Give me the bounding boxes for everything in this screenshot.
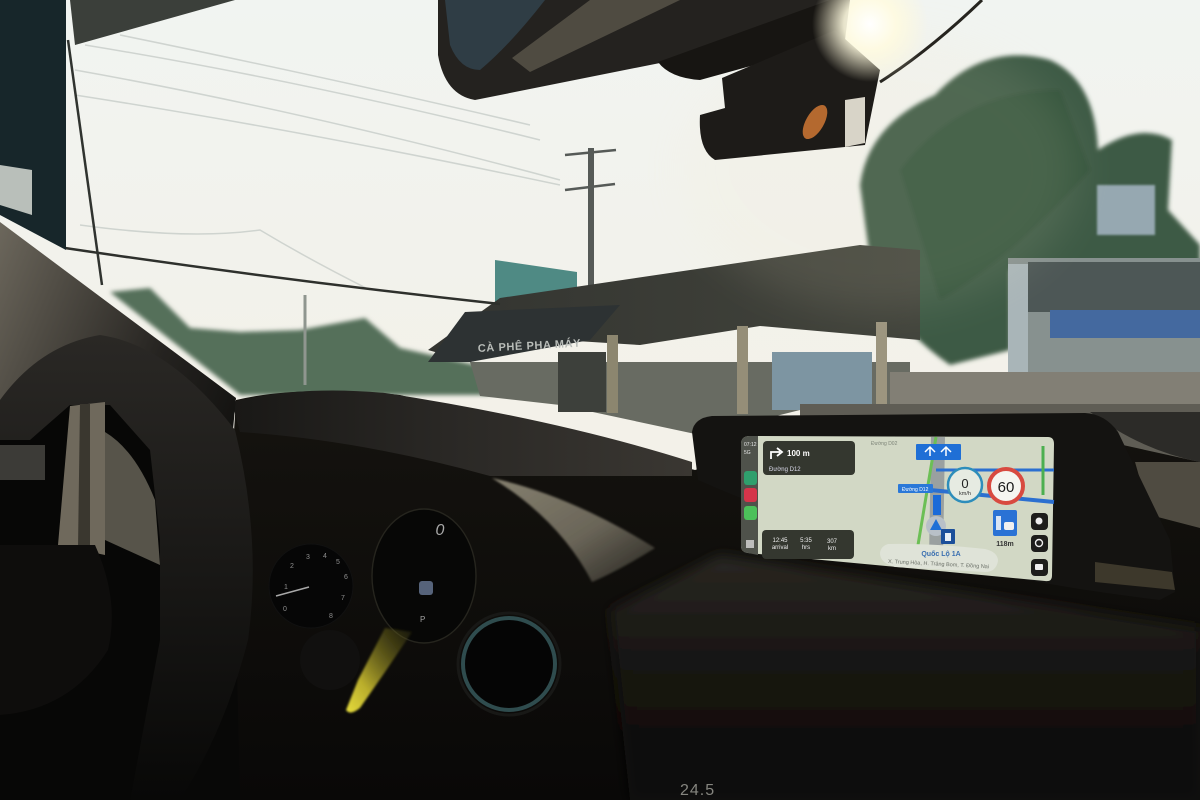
location label: X. Trung Hòa, H. Trảng Bom, T. Đồng Nai [888,559,989,570]
centre dial: 0 [436,522,445,539]
speed gauge [948,468,982,502]
tachometer: 6 [344,574,348,581]
speed gauge: km/h [959,491,971,497]
overhead power lines [75,35,560,290]
lit dashboard surface [492,478,655,582]
navigation screen: Đường D02 [871,441,898,447]
lower dashboard panel [610,555,1200,800]
tachometer: 8 [329,613,333,620]
tachometer [269,544,353,628]
centre dial [372,509,476,643]
tachometer: 5 [336,559,340,566]
round vent with teal ring [458,613,560,715]
right control buttons [1031,513,1048,576]
steering wheel [0,335,253,800]
location label: Quốc Lộ 1A [921,550,961,558]
tachometer: 3 [306,554,310,561]
trip info card [762,530,854,559]
dashboard top hood [232,390,692,476]
speed gauge: 0 [961,476,969,491]
dashboard body [210,391,1200,800]
speed limit sign: 60 [998,479,1014,496]
camera warning sign: 118m [996,541,1014,548]
road label [898,484,933,493]
instrument cluster [269,509,715,799]
sun glare over windshield [680,30,1080,310]
lane guidance sign [916,444,961,460]
roadside building: CÀ PHÊ PHA MÁY [477,337,581,355]
turn instruction card: 100 m [787,449,810,458]
left dock: 5G [744,450,751,456]
tachometer: 7 [341,595,345,602]
right-side building and fence [800,185,1200,464]
sagging cable [65,248,500,304]
dash camera [700,0,982,160]
left dock: 07:12 [744,442,757,448]
tachometer: 1 [284,584,288,591]
turn instruction card: Đường D12 [769,467,801,473]
distant treeline [110,288,490,395]
left interior pillar [0,222,240,800]
trip info card: arrival [772,545,788,551]
tachometer: 4 [323,553,327,560]
housing reflection [1095,562,1175,590]
tachometer: 0 [283,606,287,613]
trip info card: 307 [827,539,838,545]
dashboard right surface [1135,462,1200,528]
trip info card: 12:45 [772,538,788,544]
lens flare [346,628,412,713]
teal billboard [495,260,577,302]
trip info card: 5:35 [800,538,812,544]
small stalk knob [300,630,360,690]
navigation screen [741,436,1054,581]
speed limit sign [989,469,1023,503]
trip info card: hrs [802,545,810,551]
rear-view mirror [438,0,850,100]
navigation screen housing [692,413,1175,600]
turn instruction card [763,441,855,475]
trip info card: km [828,546,836,552]
road label: Đường D12 [902,487,929,493]
large tree [860,55,1200,365]
left dock [741,436,758,555]
digital readout: 24.5 [680,782,715,799]
roads [918,437,1054,560]
camera warning sign [993,510,1017,548]
location label [880,544,998,572]
centre dial: P [420,615,425,624]
left pillar and roof edge [0,0,235,285]
roadside building [428,245,920,435]
position marker [926,516,955,544]
utility pole [305,148,616,385]
sun flare [812,0,928,82]
tachometer: 2 [290,563,294,570]
